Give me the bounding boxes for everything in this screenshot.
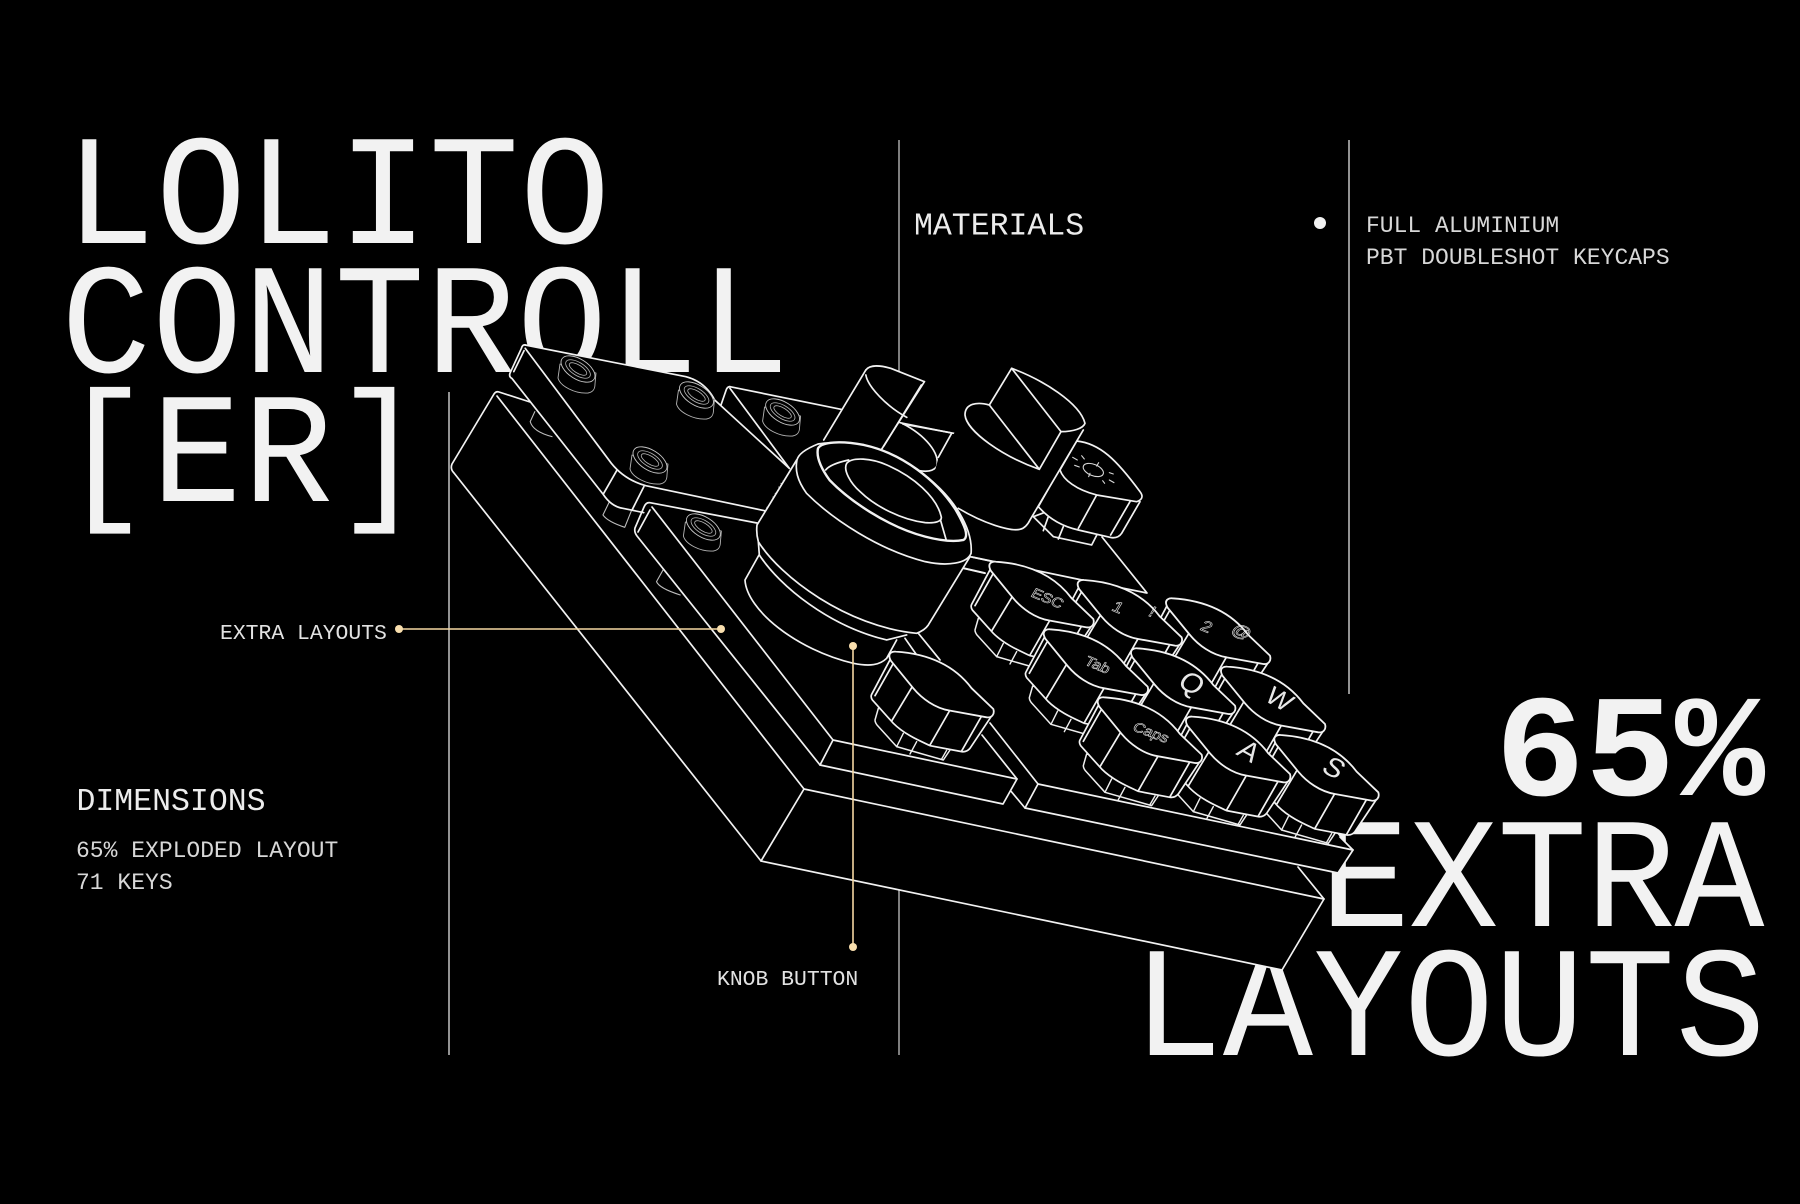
key: Q	[1113, 648, 1235, 757]
knob inner ring	[818, 442, 966, 541]
title	[60, 113, 791, 549]
knob bracket lines	[905, 557, 992, 660]
vertical guide line right	[1348, 140, 1350, 694]
callout: knob button	[717, 642, 858, 992]
top left plate	[510, 345, 789, 523]
materials heading: MATERIALS	[914, 210, 1084, 244]
key: 2	[1148, 598, 1270, 707]
dimensions list: 65% EXPLODED LAYOUT	[76, 838, 338, 864]
second layer right plate	[950, 537, 1353, 873]
key: 1: !	[1145, 603, 1159, 620]
screws top left plate	[557, 350, 718, 484]
headline: 65% extra layouts	[1132, 675, 1766, 1103]
knob button	[846, 459, 941, 523]
title: [ER]	[60, 371, 426, 549]
rear plate	[720, 387, 954, 520]
title: LOLITO	[65, 113, 611, 291]
dimensions heading: DIMENSIONS	[76, 785, 266, 820]
key: Tab: Tab	[1081, 654, 1113, 677]
key: Caps	[1079, 697, 1202, 806]
key: A: A	[1231, 734, 1267, 769]
vertical guide line centre	[898, 140, 900, 1055]
key: 1	[1059, 580, 1182, 688]
materials list	[1366, 213, 1670, 271]
materials list: PBT DOUBLESHOT KEYCAPS	[1366, 245, 1670, 271]
key: Q: Q	[1172, 666, 1211, 702]
knob top	[796, 442, 971, 564]
headline: 65% extra layouts: EXTRA	[1320, 796, 1765, 974]
knob button shoulder	[826, 460, 946, 540]
right rotary dial	[900, 368, 1085, 530]
screws rear plate	[746, 393, 804, 508]
brightness key	[1033, 441, 1142, 545]
key: 2: @	[1228, 620, 1255, 643]
peg details	[530, 412, 680, 595]
second layer left plate	[635, 503, 1017, 804]
key: S	[1256, 735, 1379, 843]
key: W	[1203, 667, 1325, 775]
headline: 65% extra layouts: LAYOUTS	[1132, 925, 1766, 1103]
key: S: S	[1316, 751, 1352, 786]
vertical guide line left	[448, 392, 450, 1055]
key: 2: 2	[1197, 617, 1216, 636]
knob lower ring	[745, 542, 907, 665]
left rotary stick	[824, 366, 937, 487]
screw second layer plate	[682, 508, 725, 551]
knob	[745, 442, 992, 665]
key: A	[1168, 717, 1290, 825]
icon: brightness sun	[1073, 456, 1114, 483]
key: Esc: ESC	[1028, 586, 1067, 612]
title: CONTROLL	[61, 242, 791, 420]
materials bullet	[1314, 217, 1326, 229]
keyboard exploded illustration	[451, 345, 1379, 970]
callout: extra layouts	[220, 622, 725, 646]
materials list: FULL ALUMINIUM	[1366, 213, 1559, 239]
key: blank front left	[871, 652, 994, 760]
dimensions list: 71 KEYS	[76, 870, 173, 896]
base plate	[451, 392, 1324, 970]
key: Esc	[971, 562, 1094, 670]
keycaps	[871, 562, 1379, 843]
key: 1: 1	[1109, 598, 1127, 617]
key: Caps: Caps	[1130, 720, 1172, 746]
callout: extra layouts: EXTRA LAYOUTS	[220, 622, 387, 646]
dimensions list	[76, 838, 338, 896]
callout: knob button: KNOB BUTTON	[717, 968, 858, 992]
headline: 65% extra layouts: 65%	[1495, 675, 1765, 839]
knob flange	[796, 443, 971, 564]
key: W: W	[1260, 681, 1300, 717]
key: Tab	[1025, 629, 1148, 738]
knob body	[757, 453, 970, 633]
